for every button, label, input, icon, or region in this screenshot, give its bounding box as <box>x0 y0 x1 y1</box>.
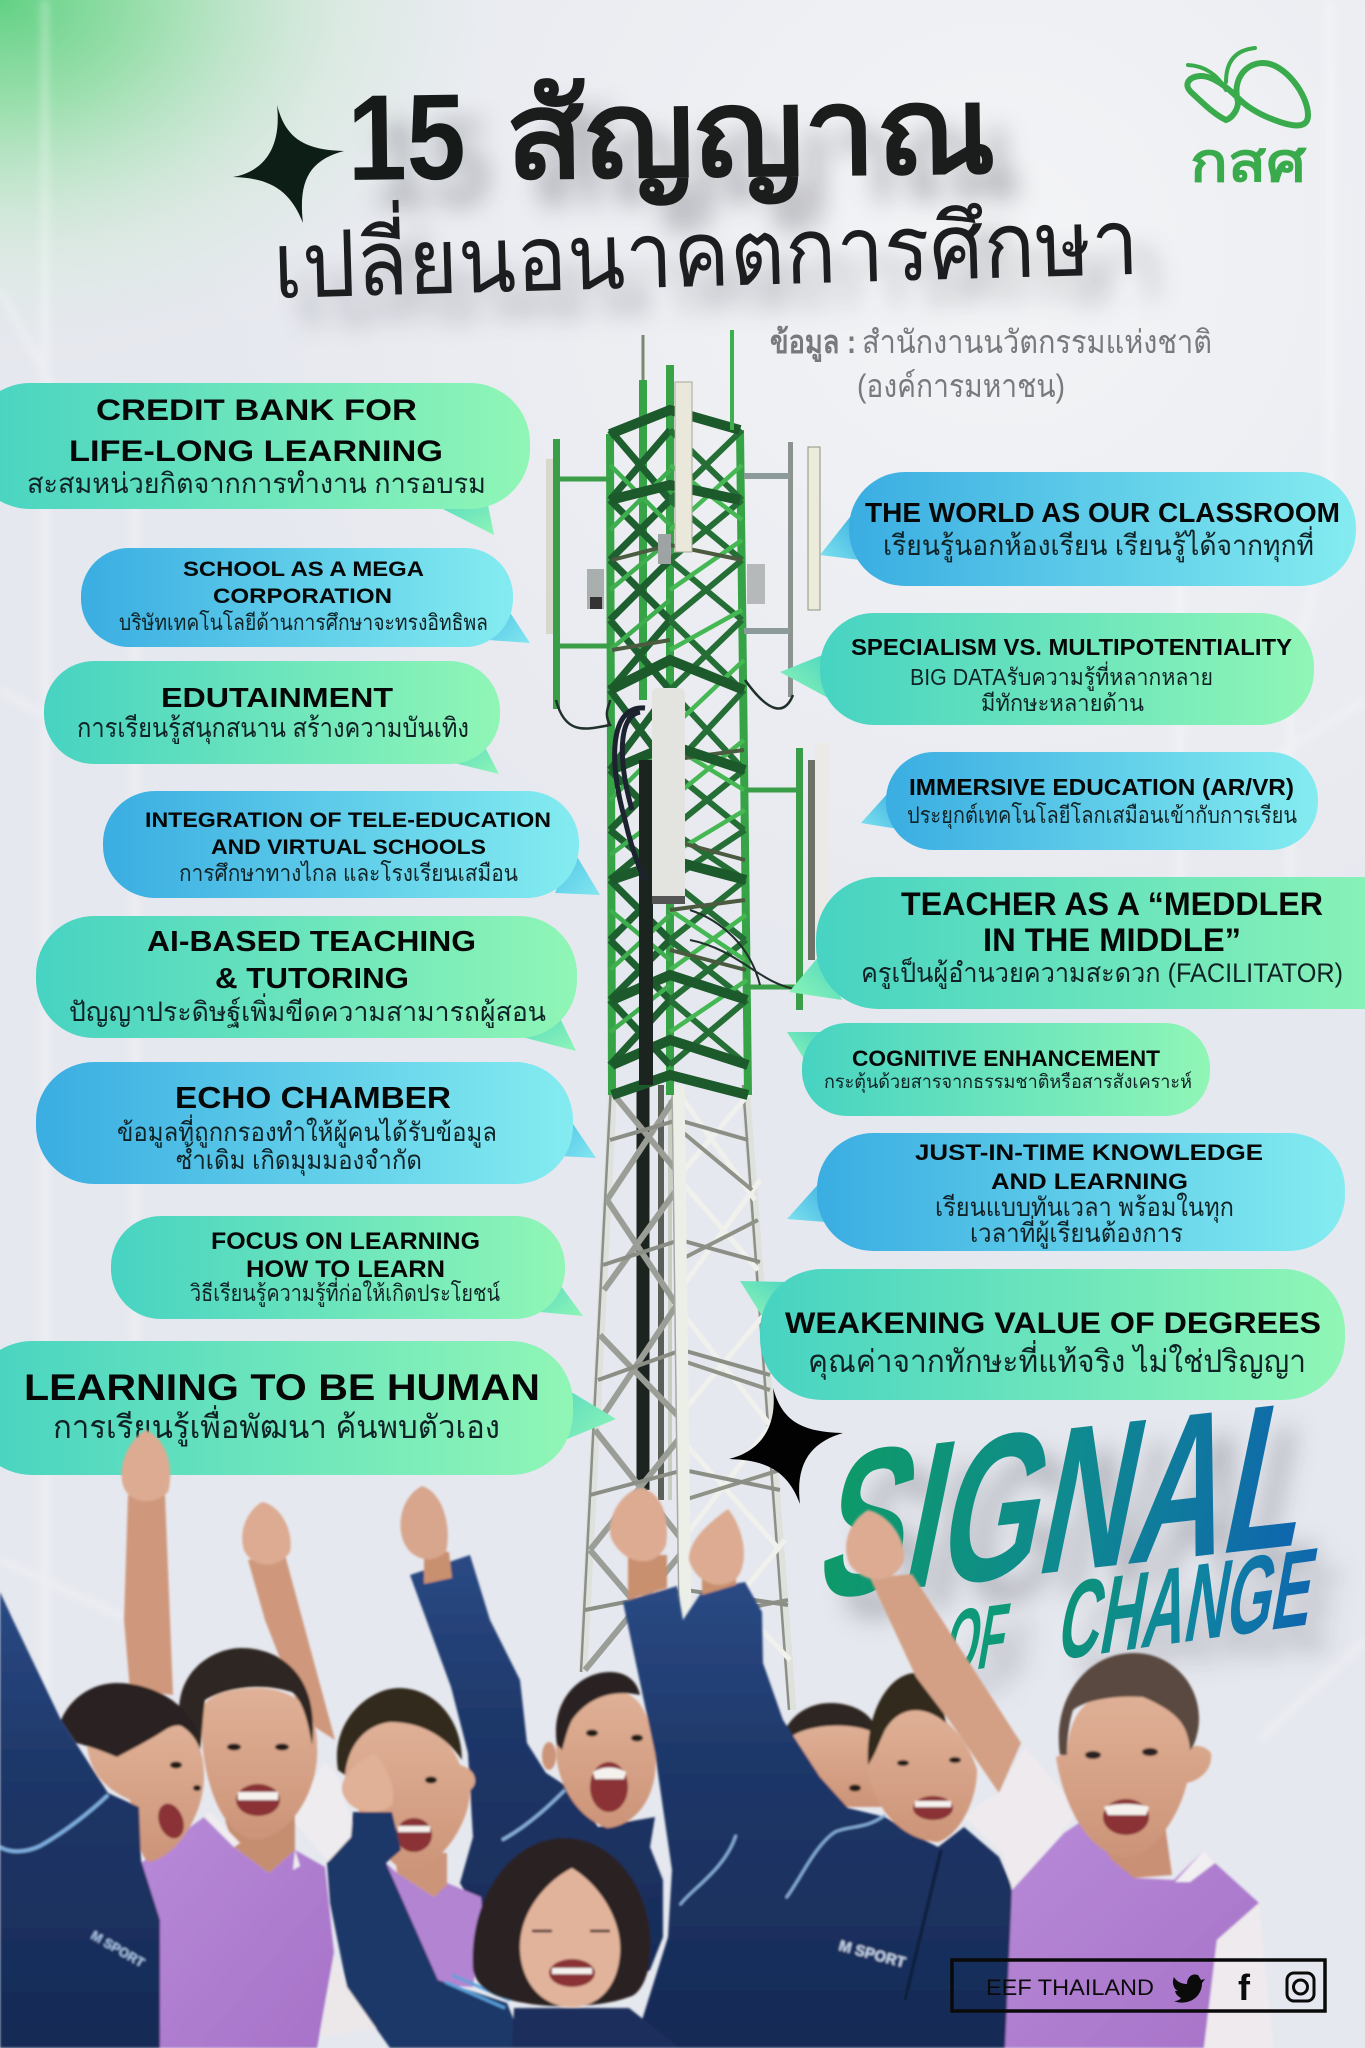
bubble: immersive education <box>861 752 1318 850</box>
thai text: สะสมหน่วยกิตจากการทำงาน การอบรม <box>27 468 486 499</box>
bubble: teacher as a meddler <box>789 877 1365 1009</box>
thai text: กระตุ้นด้วยสารจากธรรมชาติหรือสารสังเคราะห์ <box>824 1071 1192 1094</box>
heading <box>147 926 476 995</box>
thai text: ข้อมูลที่ถูกกรองทำให้ผู้คนได้รับข้อมูล <box>117 1114 497 1148</box>
heading: THE WORLD AS OUR CLASSROOM <box>865 497 1340 528</box>
icon: facebook: f <box>1238 1967 1251 2008</box>
boy C <box>337 1688 483 1987</box>
heading <box>145 809 551 859</box>
heading: & TUTORING <box>215 963 409 995</box>
thai text: การศึกษาทางไกล และโรงเรียนเสมือน <box>179 860 518 886</box>
of: OF <box>938 1584 1016 1694</box>
handle: EEF THAILAND <box>986 1975 1154 2000</box>
social bar <box>952 1960 1325 2011</box>
raised arm 1 <box>121 1430 173 1695</box>
source line 1: สำนักงานนวัตกรรมแห่งชาติ <box>862 324 1212 360</box>
icon: instagram <box>1287 1973 1314 2001</box>
bubble: credit bank <box>0 383 530 535</box>
source <box>770 324 1212 404</box>
thai text: ครูเป็นผู้อำนวยความสะดวก (FACILITATOR) <box>861 955 1343 989</box>
thai text: บริษัทเทคโนโลยีด้านการศึกษาจะทรงอิทธิพล <box>119 610 488 635</box>
heading: JUST-IN-TIME KNOWLEDGE <box>915 1140 1263 1165</box>
tower <box>546 330 829 1710</box>
thai text <box>910 661 1213 716</box>
thai text: BIG DATAรับความรู้ที่หลากหลาย <box>910 661 1213 691</box>
title line 1: สัญญาณ <box>505 62 996 208</box>
bubble: focus on learning <box>111 1216 583 1319</box>
bubble: weakening value of degrees <box>740 1269 1345 1400</box>
logo <box>1187 48 1308 193</box>
thai text: คุณค่าจากทักษะที่แท้จริง ไม่ใช่ปริญญา <box>808 1340 1306 1381</box>
thai text <box>117 1114 497 1176</box>
heading: CREDIT BANK FOR <box>96 394 417 427</box>
heading: LIFE-LONG LEARNING <box>69 435 443 468</box>
heading: INTEGRATION OF TELE-EDUCATION <box>145 809 551 832</box>
title number: 15 <box>347 69 466 206</box>
heading: LEARNING TO BE HUMAN <box>24 1367 540 1408</box>
fist in front of boy C <box>342 1753 393 1812</box>
heading: IN THE MIDDLE” <box>983 922 1241 958</box>
student far left navy jacket: M SPORT <box>88 1928 147 1970</box>
heading: ECHO CHAMBER <box>175 1080 451 1115</box>
bubble: learning to be human <box>0 1341 616 1475</box>
boy D with open mouth <box>400 1486 663 2000</box>
star <box>729 1388 843 1504</box>
bubble: cognitive enhancement <box>787 1023 1210 1116</box>
tower antennas <box>546 382 829 1010</box>
heading <box>183 558 424 608</box>
fist 2 <box>702 1575 736 1595</box>
signal of change lettering <box>804 1354 1334 1694</box>
girl at centre <box>327 1753 680 2048</box>
heading: HOW TO LEARN <box>246 1256 445 1283</box>
boy A <box>61 1683 204 1862</box>
heading <box>901 886 1323 958</box>
boy peeking at back <box>785 1703 881 1807</box>
title line 2: เปลี่ยนอนาคตการศึกษา <box>271 179 1140 318</box>
thai text: ประยุกต์เทคโนโลยีโลกเสมือนเข้ากับการเรียน <box>907 802 1297 829</box>
student far left navy jacket <box>0 1592 160 2048</box>
bubble: edutainment <box>44 661 500 774</box>
fist 1 <box>628 1555 667 1600</box>
photo: cheering students <box>0 1430 1274 2048</box>
heading: AI-BASED TEACHING <box>147 926 476 958</box>
centre raised navy arms and body <box>610 1488 1012 2048</box>
bubble: ai-based teaching <box>36 916 577 1051</box>
thai text <box>935 1192 1234 1249</box>
heading <box>211 1228 480 1283</box>
source line 1: ข้อมูล : <box>770 324 856 363</box>
bubble: world as our classroom <box>820 472 1356 586</box>
thai text: วิธีเรียนรู้ความรู้ที่ก่อให้เกิดประโยชน์ <box>190 1277 500 1307</box>
logo mark <box>1187 48 1308 125</box>
boy G with raised arm <box>846 1510 1021 1842</box>
bubble: just-in-time <box>787 1133 1345 1251</box>
boy B in purple shirt <box>141 1648 334 2048</box>
thai text: เวลาที่ผู้เรียนต้องการ <box>970 1215 1183 1249</box>
bubble: school as a mega corporation <box>81 548 530 647</box>
thai text: เรียนแบบทันเวลา พร้อมในทุก <box>935 1192 1234 1223</box>
lower white shirt <box>321 1953 384 2037</box>
heading: SPECIALISM VS. MULTIPOTENTIALITY <box>851 634 1292 660</box>
thai text: การเรียนรู้เพื่อพัฒนา ค้นพบตัวเอง <box>53 1405 500 1447</box>
title star <box>233 105 344 223</box>
thai text: มีทักษะหลายด้าน <box>981 690 1144 716</box>
heading: WEAKENING VALUE OF DEGREES <box>785 1307 1321 1340</box>
centre raised navy arms and body: M SPORT <box>837 1937 907 1972</box>
boy H in purple shirt <box>964 1653 1274 2048</box>
thai text: เรียนรู้นอกห้องเรียน เรียนรู้ได้จากทุกที่ <box>883 526 1314 563</box>
heading: AND LEARNING <box>991 1169 1188 1194</box>
heading: IMMERSIVE EDUCATION (AR/VR) <box>909 774 1294 800</box>
white sleeve <box>290 1763 356 1868</box>
source line 1 <box>770 324 1212 363</box>
bubble: echo chamber <box>36 1062 596 1184</box>
thai text: การเรียนรู้สนุกสนาน สร้างความบันเทิง <box>77 713 469 745</box>
heading <box>915 1140 1263 1194</box>
title <box>271 62 1140 318</box>
heading: EDUTAINMENT <box>161 682 393 713</box>
logo text: กสศ <box>1190 133 1307 193</box>
heading: TEACHER AS A “MEDDLER <box>901 886 1323 922</box>
thai text: ปัญญาประดิษฐ์เพิ่มขีดความสามารถผู้สอน <box>69 993 546 1028</box>
heading: COGNITIVE ENHANCEMENT <box>852 1046 1161 1071</box>
heading: SCHOOL AS A MEGA <box>183 558 424 581</box>
icon: twitter <box>1173 1974 1205 2003</box>
heading <box>69 394 443 468</box>
heading: CORPORATION <box>213 585 392 608</box>
raised arm 2 <box>242 1502 335 1740</box>
bubble: specialism vs multipotentiality <box>780 613 1314 725</box>
tower lower white lattice <box>581 1085 792 1710</box>
thai text: ซ้ำเดิม เกิดมุมมองจำกัด <box>176 1141 422 1176</box>
heading: FOCUS ON LEARNING <box>211 1228 480 1255</box>
source line 2: (องค์การมหาชน) <box>857 368 1065 404</box>
bubble: tele-education <box>103 791 600 898</box>
heading: AND VIRTUAL SCHOOLS <box>211 836 486 859</box>
tower upper green lattice <box>610 330 748 1095</box>
